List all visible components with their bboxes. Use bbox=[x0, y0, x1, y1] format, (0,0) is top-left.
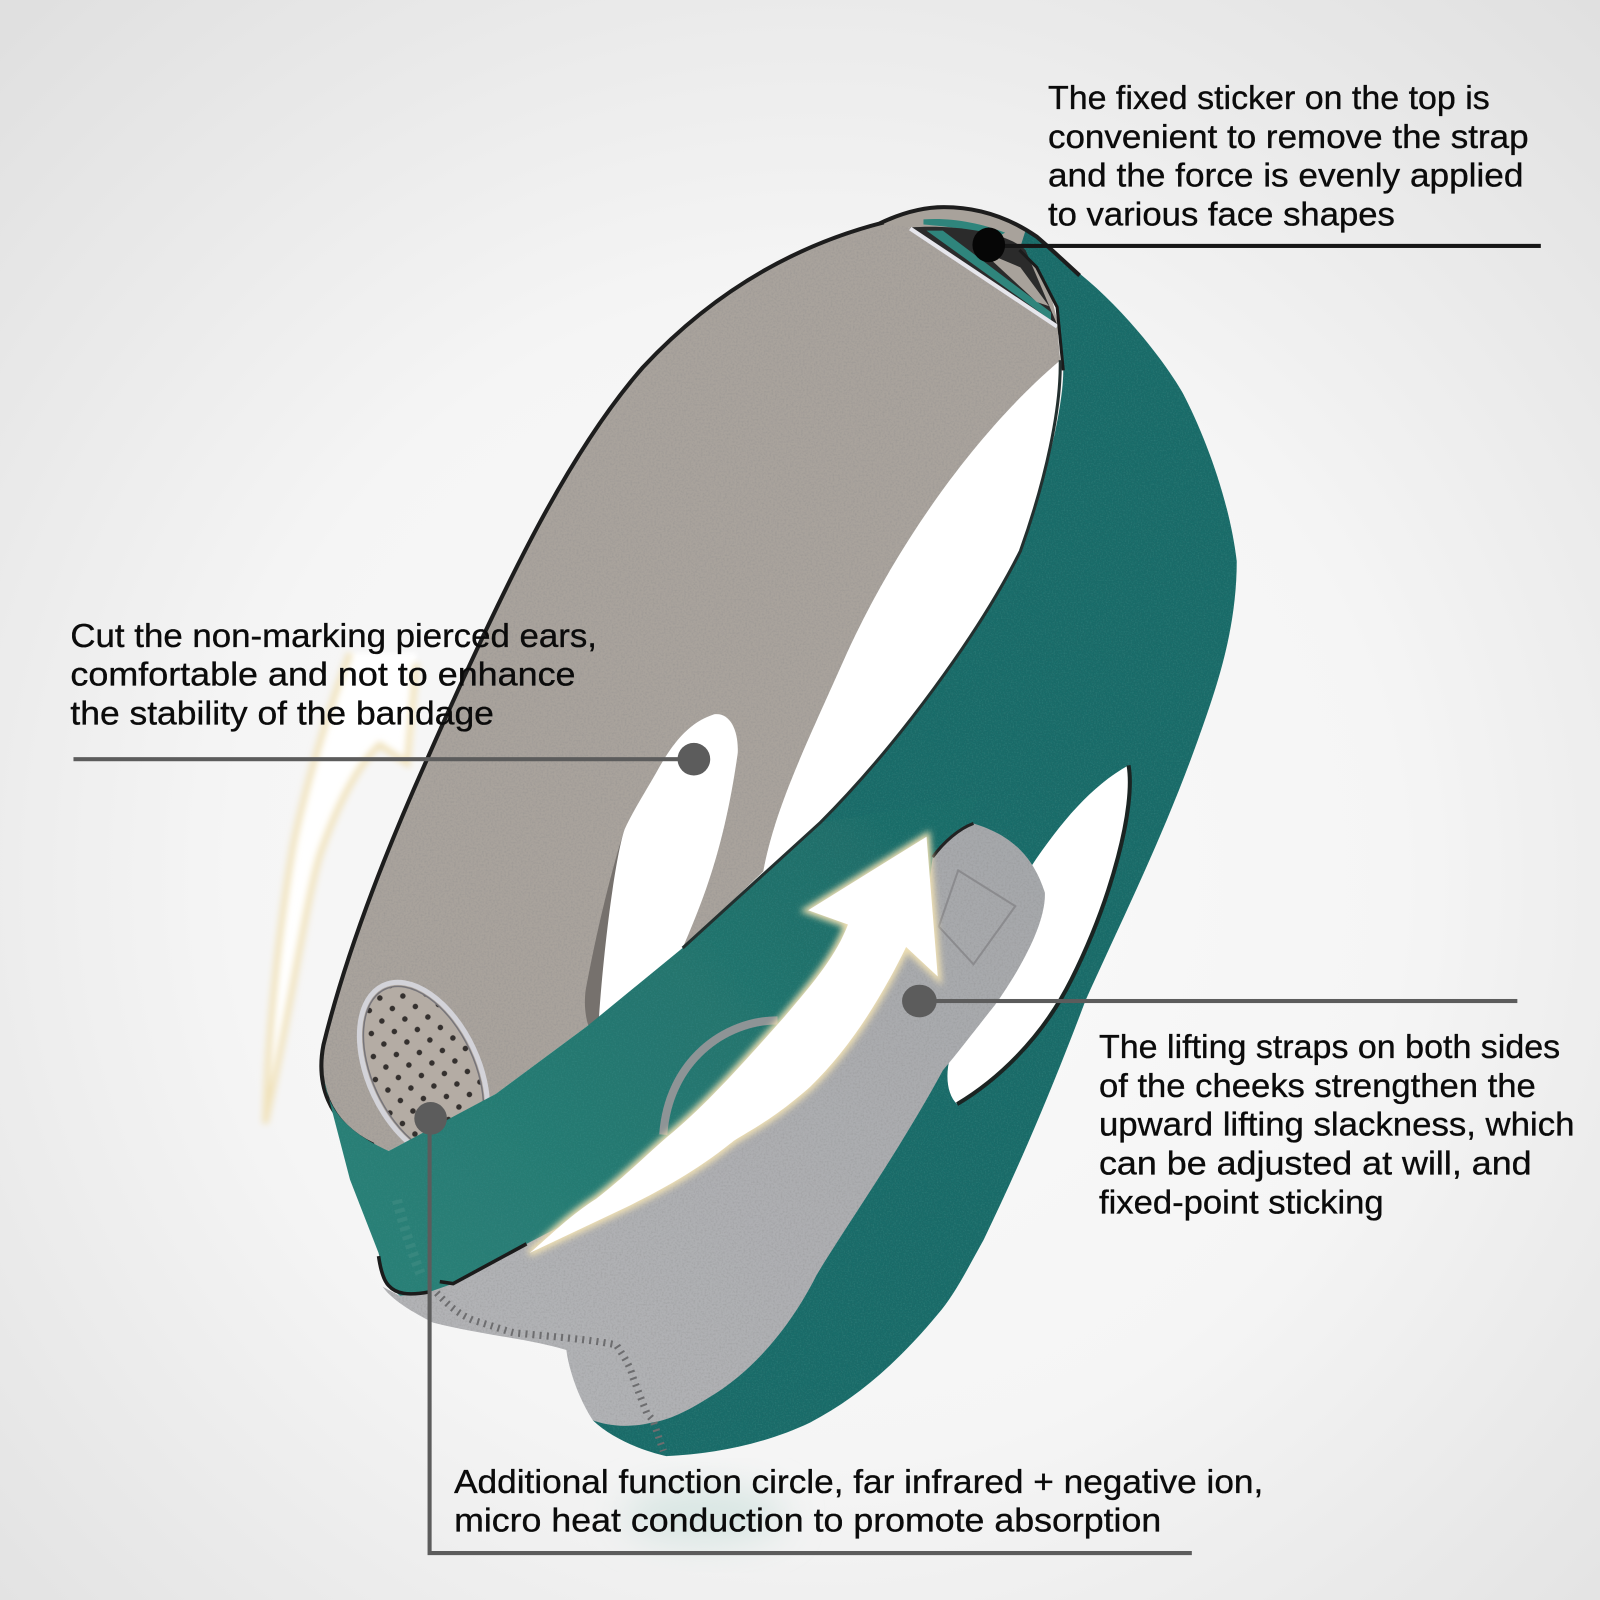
ghost lift arrow on the left bbox=[265, 653, 416, 1123]
white gap inside the band bbox=[763, 360, 1060, 871]
white lift arrow bbox=[530, 837, 938, 1253]
band upper edge line bbox=[683, 360, 1060, 948]
sticker text: to various face shapes bbox=[1048, 197, 1395, 234]
outer black edge bbox=[321, 207, 1080, 1145]
perforated pad bbox=[333, 962, 514, 1181]
strap leader line and dot bbox=[902, 985, 1517, 1017]
velcro patch outline bbox=[939, 870, 1015, 964]
sticker text: and the force is evenly applied bbox=[1048, 158, 1523, 195]
ear hole bbox=[585, 714, 738, 1027]
strap text: fixed-point sticking bbox=[1099, 1184, 1384, 1221]
ear text: comfortable and not to enhance bbox=[70, 657, 576, 694]
ear text bbox=[70, 618, 597, 732]
top fixed sticker details bbox=[910, 219, 1063, 370]
sticker text: The fixed sticker on the top is bbox=[1048, 80, 1490, 117]
back teal strap silhouette bbox=[571, 231, 1237, 1456]
function circle text: Additional function circle, far infrared + negative ion, bbox=[454, 1464, 1263, 1501]
strap text bbox=[1099, 1029, 1574, 1221]
grey lifting strap bbox=[383, 823, 1045, 1426]
ear leader line and dot bbox=[73, 743, 710, 776]
callout: ear holes bbox=[70, 618, 710, 776]
grey inner lining bbox=[321, 222, 1060, 1151]
band seam stitching bbox=[397, 1200, 420, 1273]
strap text: can be adjusted at will, and bbox=[1099, 1145, 1532, 1182]
stitched function circle bbox=[663, 1020, 778, 1135]
callout: lifting straps bbox=[902, 985, 1574, 1221]
top sticker base bbox=[880, 207, 1061, 337]
ear text: Cut the non-marking pierced ears, bbox=[70, 618, 597, 655]
ear text: the stability of the bandage bbox=[70, 695, 494, 732]
right white cheek hole bbox=[947, 765, 1130, 1104]
function circle leader line and dot bbox=[414, 1102, 1192, 1553]
strap bottom black edge bbox=[379, 1244, 527, 1294]
callout: fixed sticker bbox=[972, 80, 1541, 262]
floor reflection bbox=[622, 1487, 786, 1544]
function circle text bbox=[454, 1464, 1263, 1540]
sticker text: convenient to remove the strap bbox=[1048, 119, 1529, 156]
sticker leader line and dot bbox=[972, 228, 1541, 262]
front teal band bbox=[324, 796, 980, 1296]
cheek hole dark edge bbox=[957, 765, 1130, 1104]
callout: function circle bbox=[414, 1102, 1263, 1553]
function circle text: micro heat conduction to promote absorption bbox=[454, 1503, 1161, 1540]
strap text: of the cheeks strengthen the bbox=[1099, 1068, 1536, 1105]
strap top dark edge bbox=[933, 823, 973, 857]
sticker text bbox=[1048, 80, 1529, 234]
strap stitching bbox=[437, 1293, 663, 1451]
strap text: upward lifting slackness, which bbox=[1099, 1107, 1574, 1144]
strap text: The lifting straps on both sides bbox=[1099, 1029, 1560, 1066]
